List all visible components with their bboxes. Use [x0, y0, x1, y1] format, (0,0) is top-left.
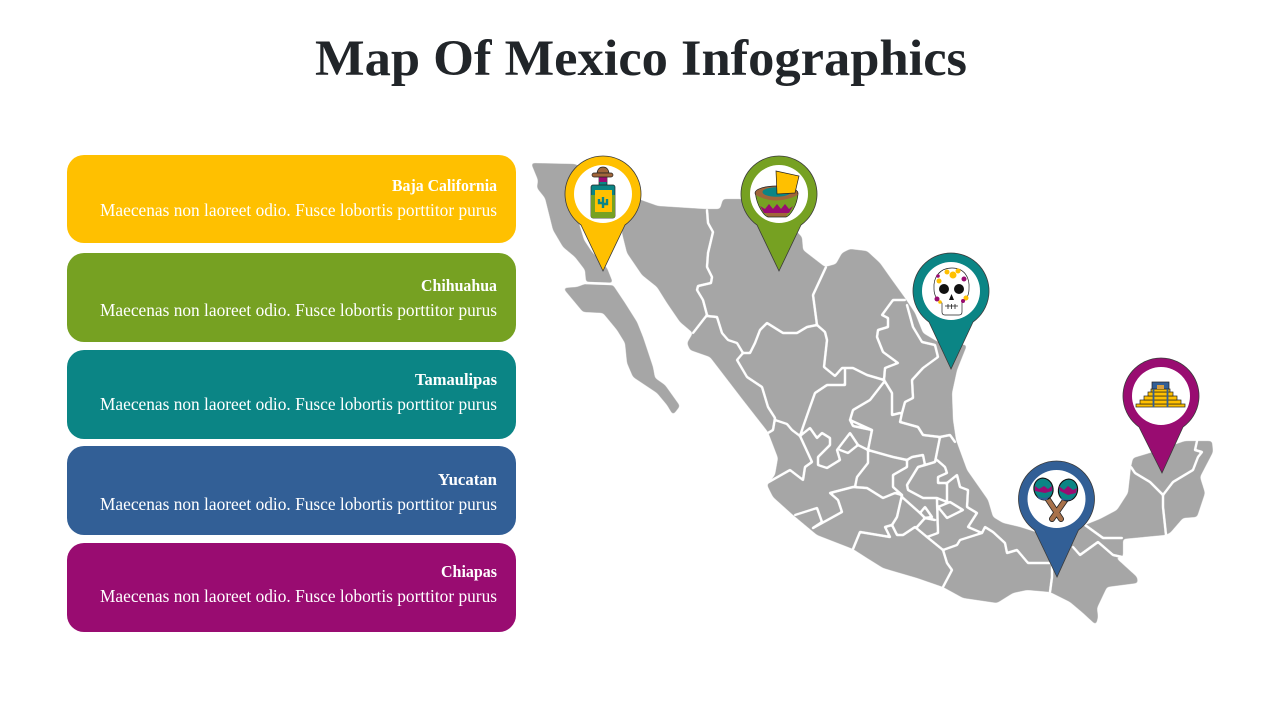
- icon: guacamole bowl: [755, 171, 799, 217]
- panel: Yucatan: [67, 446, 516, 535]
- map of Mexico: [531, 163, 1213, 625]
- icon: tequila bottle: [591, 167, 615, 218]
- panel: Yucatan: Yucatan: [438, 470, 498, 489]
- panel: Baja California: [67, 155, 516, 243]
- panel: Chihuahua: Maecenas non laoreet odio. Fusce lobortis porttitor purus: [100, 300, 497, 320]
- map pin: tequila bottle: [565, 156, 641, 271]
- panel: Tamaulipas: Maecenas non laoreet odio. Fusce lobortis porttitor purus: [100, 394, 497, 414]
- icon: pyramid: [1136, 382, 1185, 407]
- map pin: guacamole bowl: [741, 156, 817, 271]
- icon: sugar skull: [934, 268, 969, 315]
- map pin: sugar skull: [913, 253, 989, 369]
- panel: Chihuahua: Chihuahua: [421, 276, 497, 295]
- panel: Baja California: Baja California: [392, 176, 497, 195]
- icon: maracas: [1031, 476, 1080, 519]
- panel: Yucatan: Maecenas non laoreet odio. Fusce lobortis porttitor purus: [100, 494, 497, 514]
- panel: Tamaulipas: [67, 350, 516, 439]
- map pin: maracas: [1018, 461, 1094, 577]
- panel: Chiapas: [67, 543, 516, 632]
- map pin: pyramid: [1123, 358, 1199, 473]
- panel: Chiapas: Chiapas: [441, 562, 497, 581]
- panel: Chihuahua: [67, 253, 516, 342]
- panel: Baja California: Maecenas non laoreet odio. Fusce lobortis porttitor purus: [100, 200, 497, 220]
- state borders: [586, 210, 1202, 592]
- panel: Tamaulipas: Tamaulipas: [415, 370, 497, 389]
- panel: Chiapas: Maecenas non laoreet odio. Fusce lobortis porttitor purus: [100, 586, 497, 606]
- title: Map Of Mexico Infographics: [315, 31, 967, 87]
